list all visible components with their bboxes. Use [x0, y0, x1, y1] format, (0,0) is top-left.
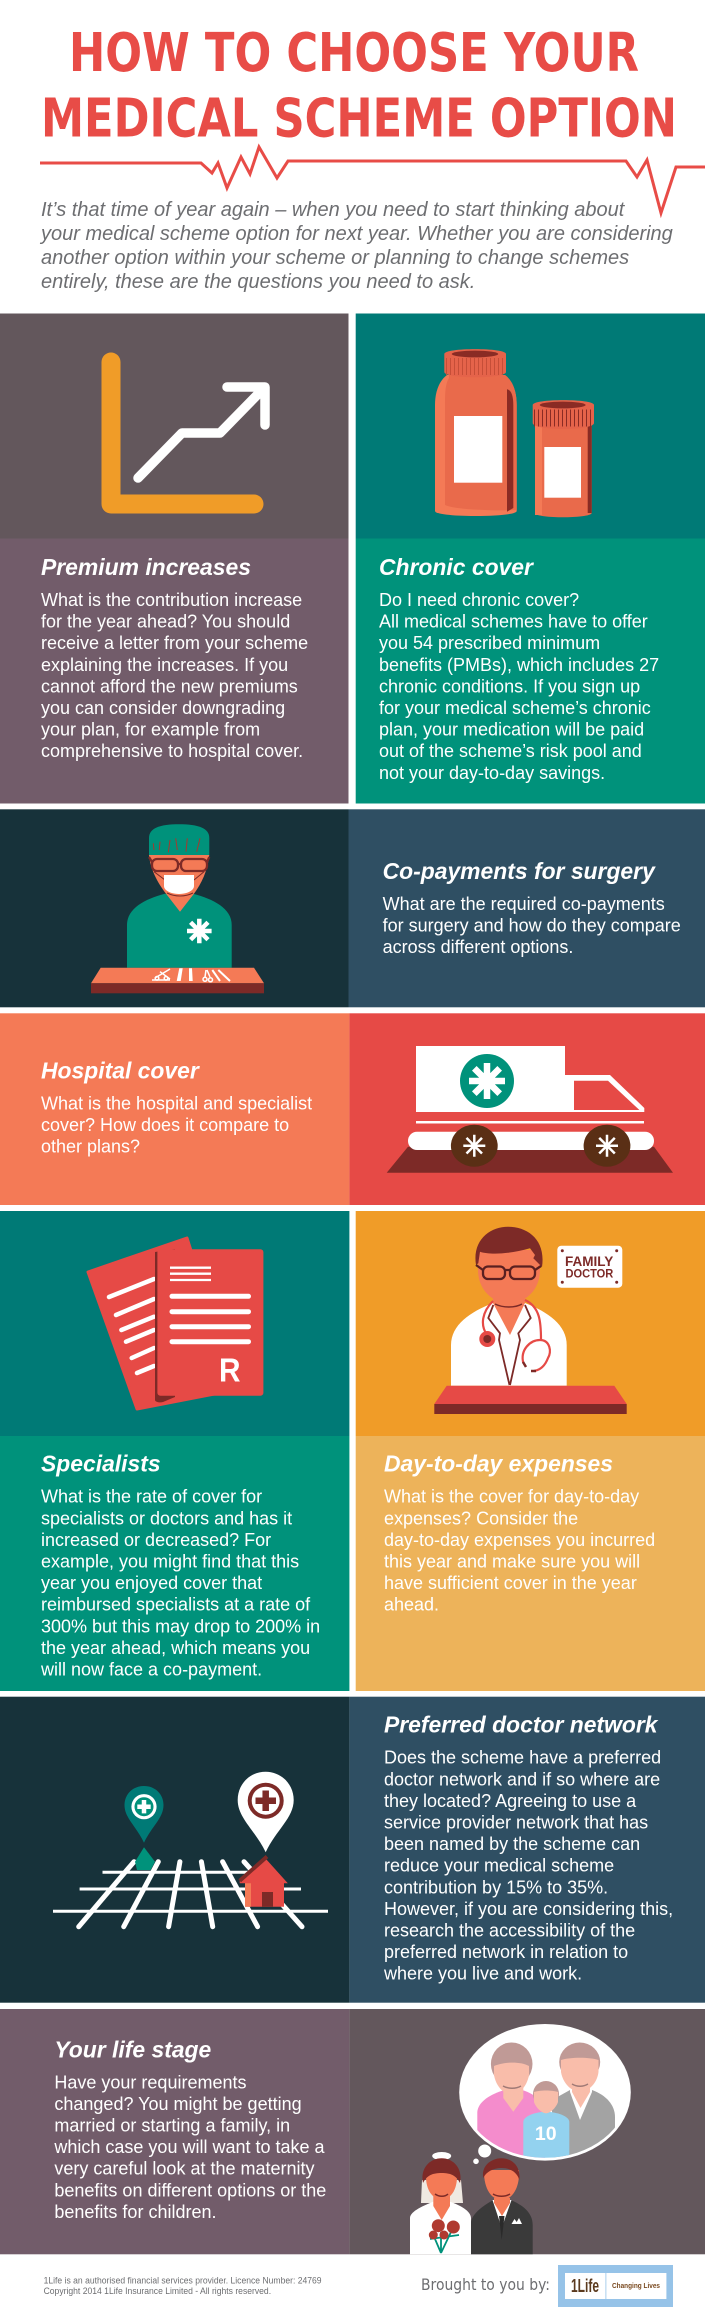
body text: cover? How does it compare to — [41, 1115, 289, 1135]
body text: which case you will want to take a — [53, 2137, 326, 2157]
body text: year you enjoyed cover that — [41, 1573, 262, 1593]
body text: 300% but this may drop to 200% in — [41, 1616, 320, 1636]
intro text: It’s that time of year again – when you need to start thinking about — [41, 199, 626, 221]
body text: reduce your medical scheme — [384, 1856, 614, 1876]
body text: this year and make sure you will — [384, 1552, 640, 1572]
icon: thought bubble with family: 10 — [535, 2123, 557, 2145]
panel: preferred doctor network — [0, 1697, 705, 2003]
body text: explaining the increases. If you — [41, 655, 288, 675]
heading: Premium increases — [41, 554, 251, 580]
body text: across different options. — [383, 937, 573, 957]
body text: been named by the scheme can — [384, 1834, 640, 1854]
body text: comprehensive to hospital cover. — [41, 741, 303, 761]
heading: Your life stage — [54, 2037, 212, 2063]
body text: ahead. — [384, 1595, 439, 1615]
body text — [379, 590, 659, 783]
body text: not your day-to-day savings. — [379, 763, 605, 783]
icon: ambulance — [387, 1046, 673, 1173]
body text: you can consider downgrading — [41, 698, 285, 718]
body text: for surgery and how do they compare — [383, 916, 681, 936]
heading: Preferred doctor network — [384, 1712, 659, 1738]
footer legal text: 1Life is an authorised financial services provider. Licence Number: 24769 — [44, 2275, 322, 2285]
body text: What is the hospital and specialist — [41, 1093, 312, 1113]
body text — [383, 1748, 673, 1984]
body text: plan, your medication will be paid — [379, 720, 644, 740]
heading: Chronic cover — [379, 554, 534, 580]
icon: family doctor — [434, 1227, 627, 1414]
body text: benefits for children. — [54, 2202, 216, 2222]
heading: Hospital cover — [41, 1058, 200, 1084]
icon: family doctor: FAMILY — [565, 1253, 614, 1269]
icon: rising chart — [111, 362, 265, 504]
body text: cannot afford the new premiums — [41, 676, 298, 696]
body text — [53, 2072, 326, 2222]
body text: All medical schemes have to offer — [379, 612, 648, 632]
body text: out of the scheme’s risk pool and — [379, 741, 642, 761]
body text: will now face a co-payment. — [40, 1660, 262, 1680]
heartbeat line — [40, 147, 705, 213]
panel: chronic cover — [356, 314, 705, 804]
body text — [41, 590, 308, 761]
body text: changed? You might be getting — [54, 2094, 302, 2114]
body text: What is the rate of cover for — [41, 1487, 262, 1507]
body text: increased or decreased? For — [41, 1530, 271, 1550]
body text: where you live and work. — [383, 1964, 582, 1984]
heading: Day-to-day expenses — [384, 1451, 613, 1477]
body text: service provider network that has — [384, 1812, 648, 1832]
body text: Have your requirements — [54, 2072, 246, 2092]
body text: you 54 prescribed minimum — [379, 633, 600, 653]
body text: contribution by 15% to 35%. — [384, 1877, 608, 1897]
icon: medicine bottles — [435, 349, 594, 517]
logo: 1Life — [558, 2265, 673, 2307]
body text: day-to-day expenses you incurred — [384, 1530, 655, 1550]
intro text: another option within your scheme or planning to change schemes — [41, 247, 629, 269]
body text: for your medical scheme’s chronic — [379, 698, 651, 718]
body text: the year ahead, which means you — [41, 1638, 310, 1658]
body text: expenses? Consider the — [384, 1508, 578, 1528]
body text: very careful look at the maternity — [54, 2159, 315, 2179]
body text — [383, 894, 681, 957]
icon: groom — [471, 2158, 533, 2254]
body text: However, if you are considering this, — [384, 1899, 673, 1919]
body text: Do I need chronic cover? — [379, 590, 579, 610]
icon: prescription documents: R — [219, 1352, 241, 1389]
body text: What is the contribution increase — [41, 590, 302, 610]
footer legal text: Copyright 2014 1Life Insurance Limited - All rights reserved. — [44, 2286, 271, 2296]
intro text — [39, 199, 673, 293]
body text: they located? Agreeing to use a — [384, 1791, 637, 1811]
body text: receive a letter from your scheme — [41, 633, 308, 653]
intro text: your medical scheme option for next year. Whether you are considering — [39, 223, 673, 245]
icon: surgeon — [91, 824, 264, 993]
brought to you by: Brought to you by: — [421, 2275, 550, 2294]
body text — [384, 1487, 655, 1615]
body text — [41, 1093, 312, 1156]
body text: specialists or doctors and has it — [41, 1508, 292, 1528]
logo: 1Life: Changing Lives — [612, 2281, 660, 2290]
body text: example, you might find that this — [41, 1552, 299, 1572]
panel: your life stage — [0, 2009, 705, 2254]
body text: benefits (PMBs), which includes 27 — [379, 655, 659, 675]
body text: What are the required co-payments — [383, 894, 665, 914]
title — [41, 21, 677, 150]
panel: hospital cover — [0, 1013, 705, 1205]
body text: benefits on different options or the — [54, 2180, 326, 2200]
footer legal text — [44, 2275, 322, 2296]
icon: map with pins — [53, 1772, 328, 1927]
body text: research the accessibility of the — [384, 1920, 635, 1940]
body text: Does the scheme have a preferred — [384, 1748, 661, 1768]
icon: family doctor: DOCTOR — [566, 1268, 614, 1281]
body text: doctor network and if so where are — [384, 1769, 660, 1789]
intro text: entirely, these are the questions you need to ask. — [41, 271, 475, 293]
body text: What is the cover for day-to-day — [384, 1487, 639, 1507]
body text — [40, 1487, 320, 1680]
body text: preferred network in relation to — [384, 1942, 628, 1962]
body text: reimbursed specialists at a rate of — [41, 1595, 311, 1615]
body text: married or starting a family, in — [54, 2116, 290, 2136]
body text: have sufficient cover in the year — [384, 1573, 637, 1593]
panel: specialists — [0, 1211, 349, 1691]
body text: your plan, for example from — [41, 720, 260, 740]
body text: for the year ahead? You should — [41, 612, 290, 632]
heading: Specialists — [41, 1451, 161, 1477]
icon: thought bubble with family — [459, 2024, 631, 2165]
icon: prescription documents — [88, 1238, 263, 1409]
panel: co-payments for surgery — [0, 809, 705, 1007]
heading: Co-payments for surgery — [383, 858, 656, 884]
logo: 1Life: 1Life — [571, 2276, 599, 2296]
panel: day-to-day expenses — [356, 1211, 705, 1691]
panel: premium increases — [0, 314, 348, 804]
body text: other plans? — [41, 1136, 140, 1156]
icon: bride — [410, 2152, 471, 2254]
body text: chronic conditions. If you sign up — [379, 676, 640, 696]
